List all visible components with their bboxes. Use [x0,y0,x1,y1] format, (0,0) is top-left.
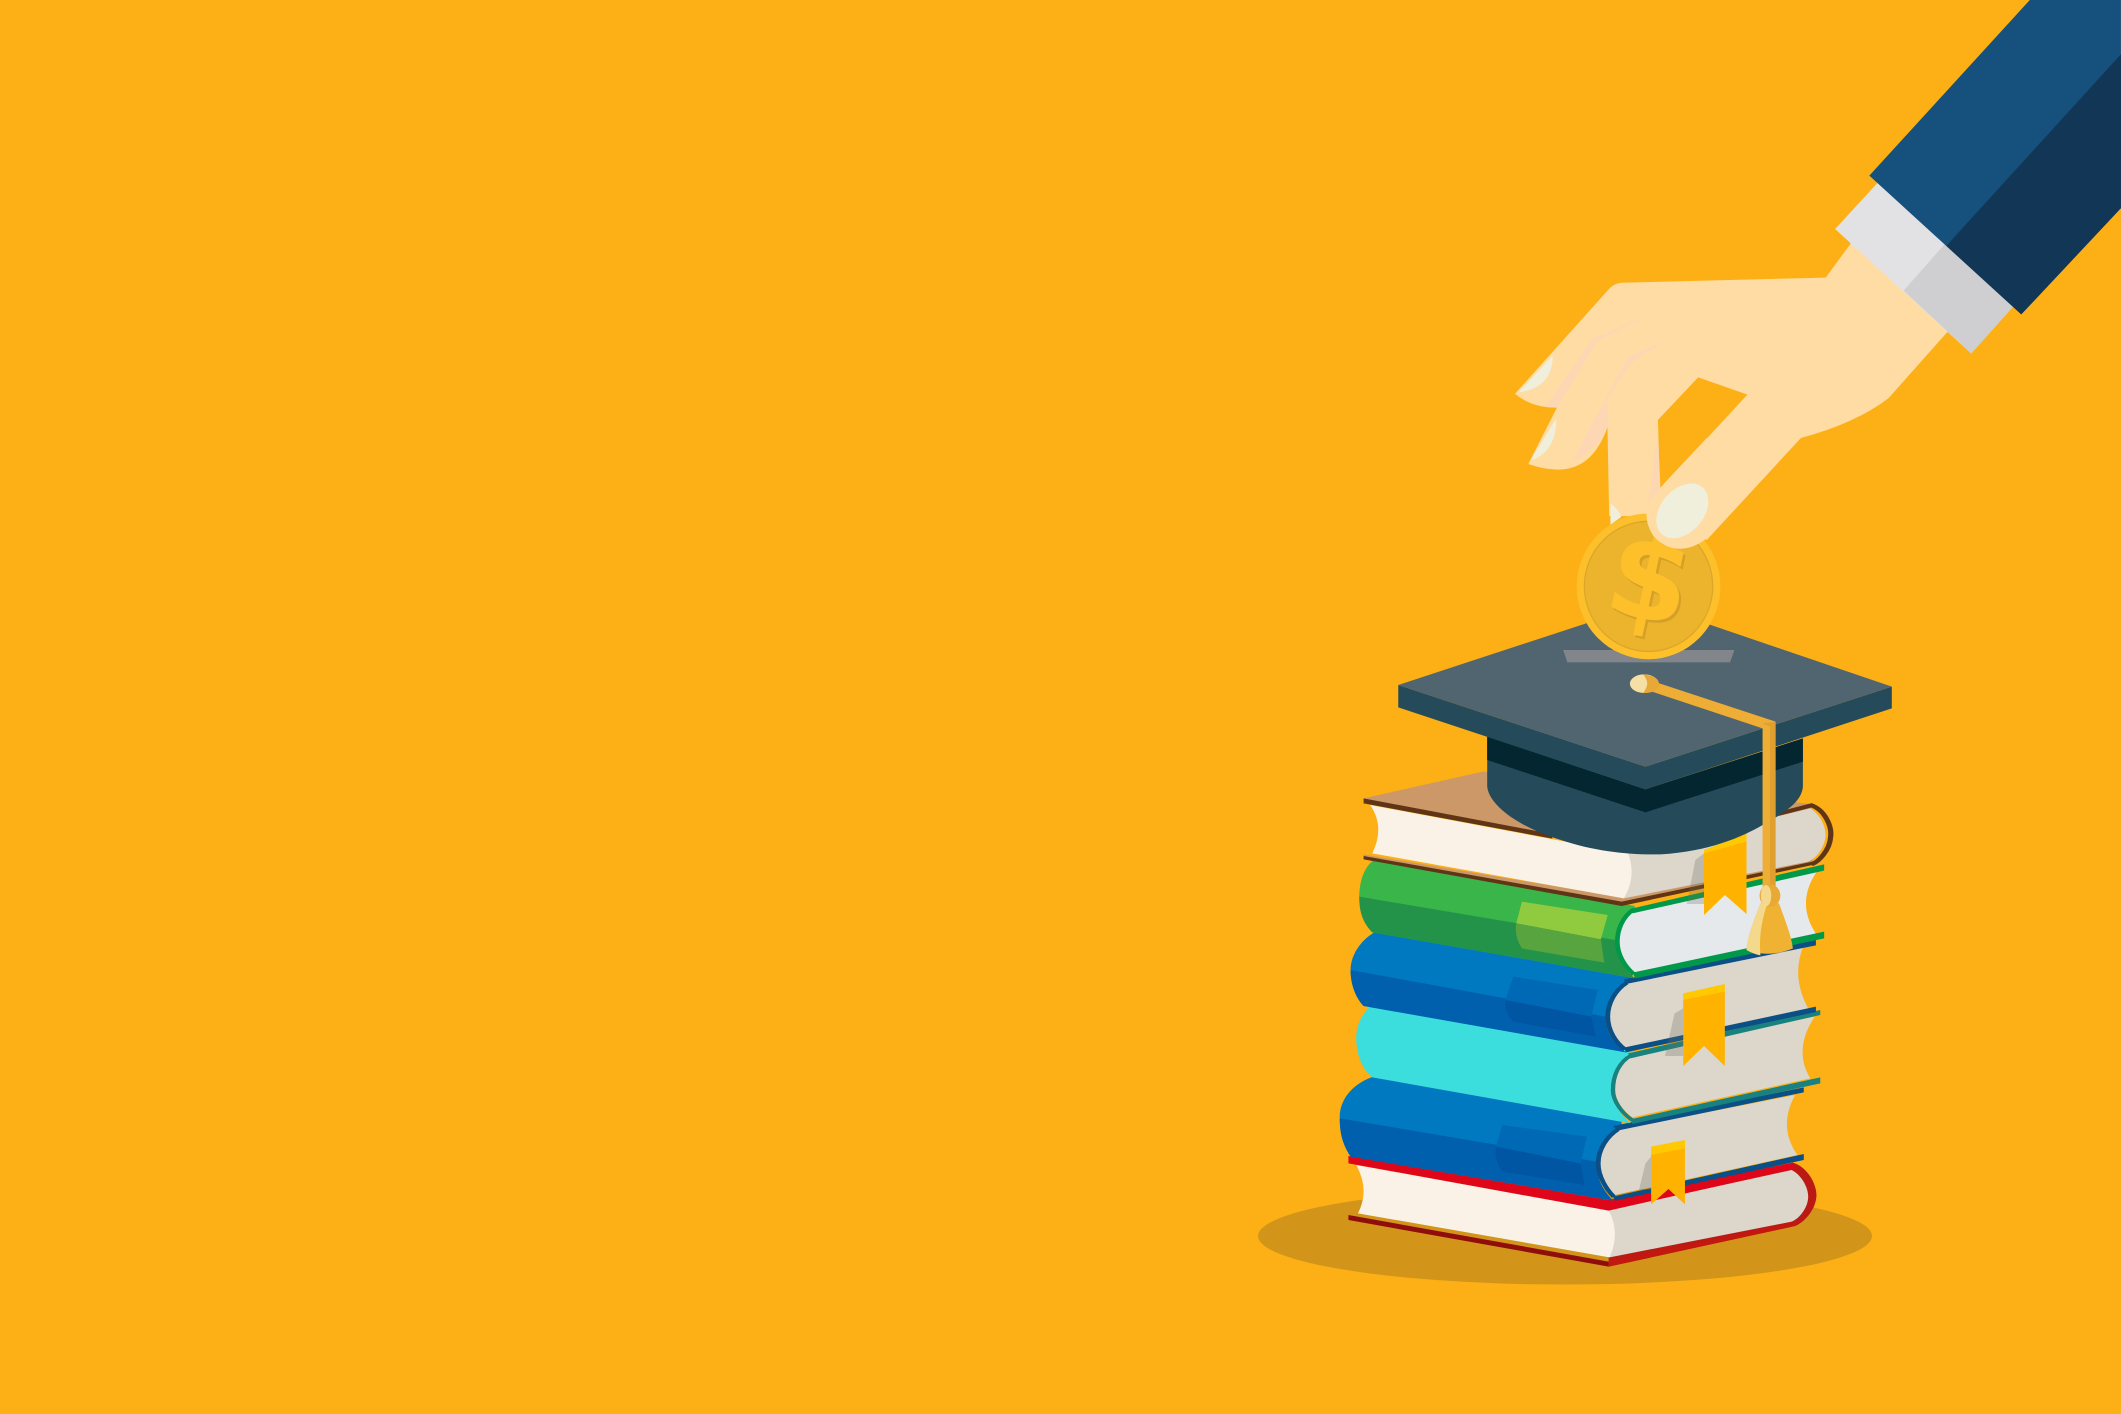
cap skull [1487,737,1803,854]
bookmark: lower [1639,1140,1685,1204]
book: blue lower [1340,1074,1804,1201]
fingernails [1518,356,1621,525]
graduation cap [1398,603,1892,854]
finger creases [1546,314,1664,516]
stack of books [1340,603,1892,1267]
bookmark: top [1687,833,1747,915]
sleeve [1869,0,2121,314]
book: brown top [1364,772,1831,906]
cap board sides [1398,685,1892,789]
cap board top [1398,603,1892,767]
hand [1515,230,1963,540]
coin: $ [1596,502,1704,655]
book: blue upper [1351,928,1816,1052]
ground shadow [1258,1188,1872,1284]
book: cyan [1356,1002,1820,1124]
tassel [1630,674,1793,955]
hand with sleeve and coin [1515,0,2121,659]
bookmark: middle [1665,984,1725,1066]
cap band [1487,737,1803,812]
dollar sign: $ [1598,504,1706,657]
book: green [1359,857,1824,978]
thumb [1646,438,1750,549]
cuff [1835,178,2018,353]
book: red bottom [1348,1156,1816,1267]
coin slot [1563,650,1734,662]
